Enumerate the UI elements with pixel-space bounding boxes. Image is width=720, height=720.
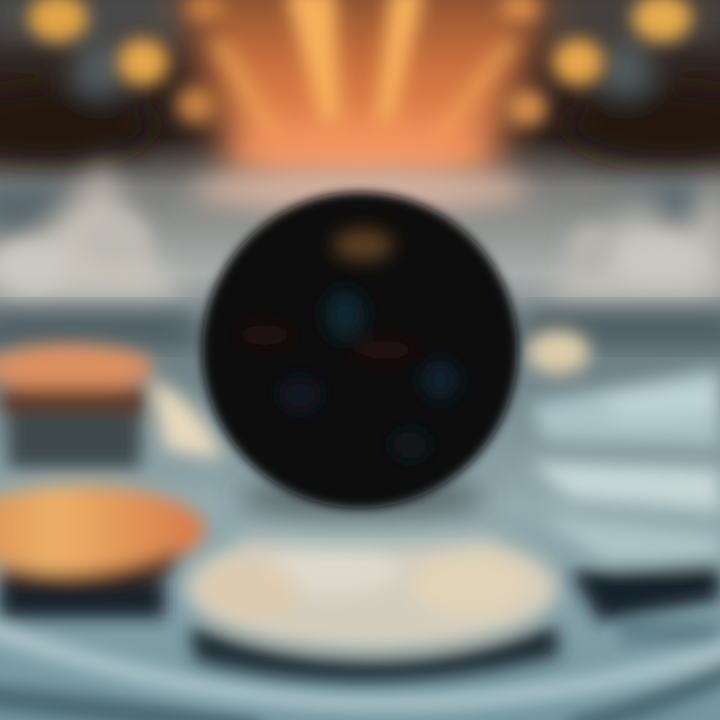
- pink haze beneath the glow: [190, 168, 530, 212]
- orange glow: [175, 0, 555, 175]
- shadow under sphere: [237, 478, 487, 518]
- sphere inner details: [237, 229, 458, 459]
- horizon glow: [235, 126, 485, 174]
- panel: small cream accent right of sphere: [526, 330, 590, 374]
- dark side clouds: [0, 0, 720, 163]
- light rays: [205, 0, 525, 140]
- panel: lower water rings: [0, 625, 720, 720]
- panel: right ice slabs: [530, 368, 720, 644]
- panel: sunburst sky: [0, 0, 720, 175]
- icon: black sphere: [202, 192, 518, 508]
- panel: left orange discs: [0, 344, 222, 618]
- panel: pedestal: [186, 521, 560, 681]
- icon: glowing lights: [28, 0, 692, 126]
- panel: pale mountains: [0, 160, 720, 342]
